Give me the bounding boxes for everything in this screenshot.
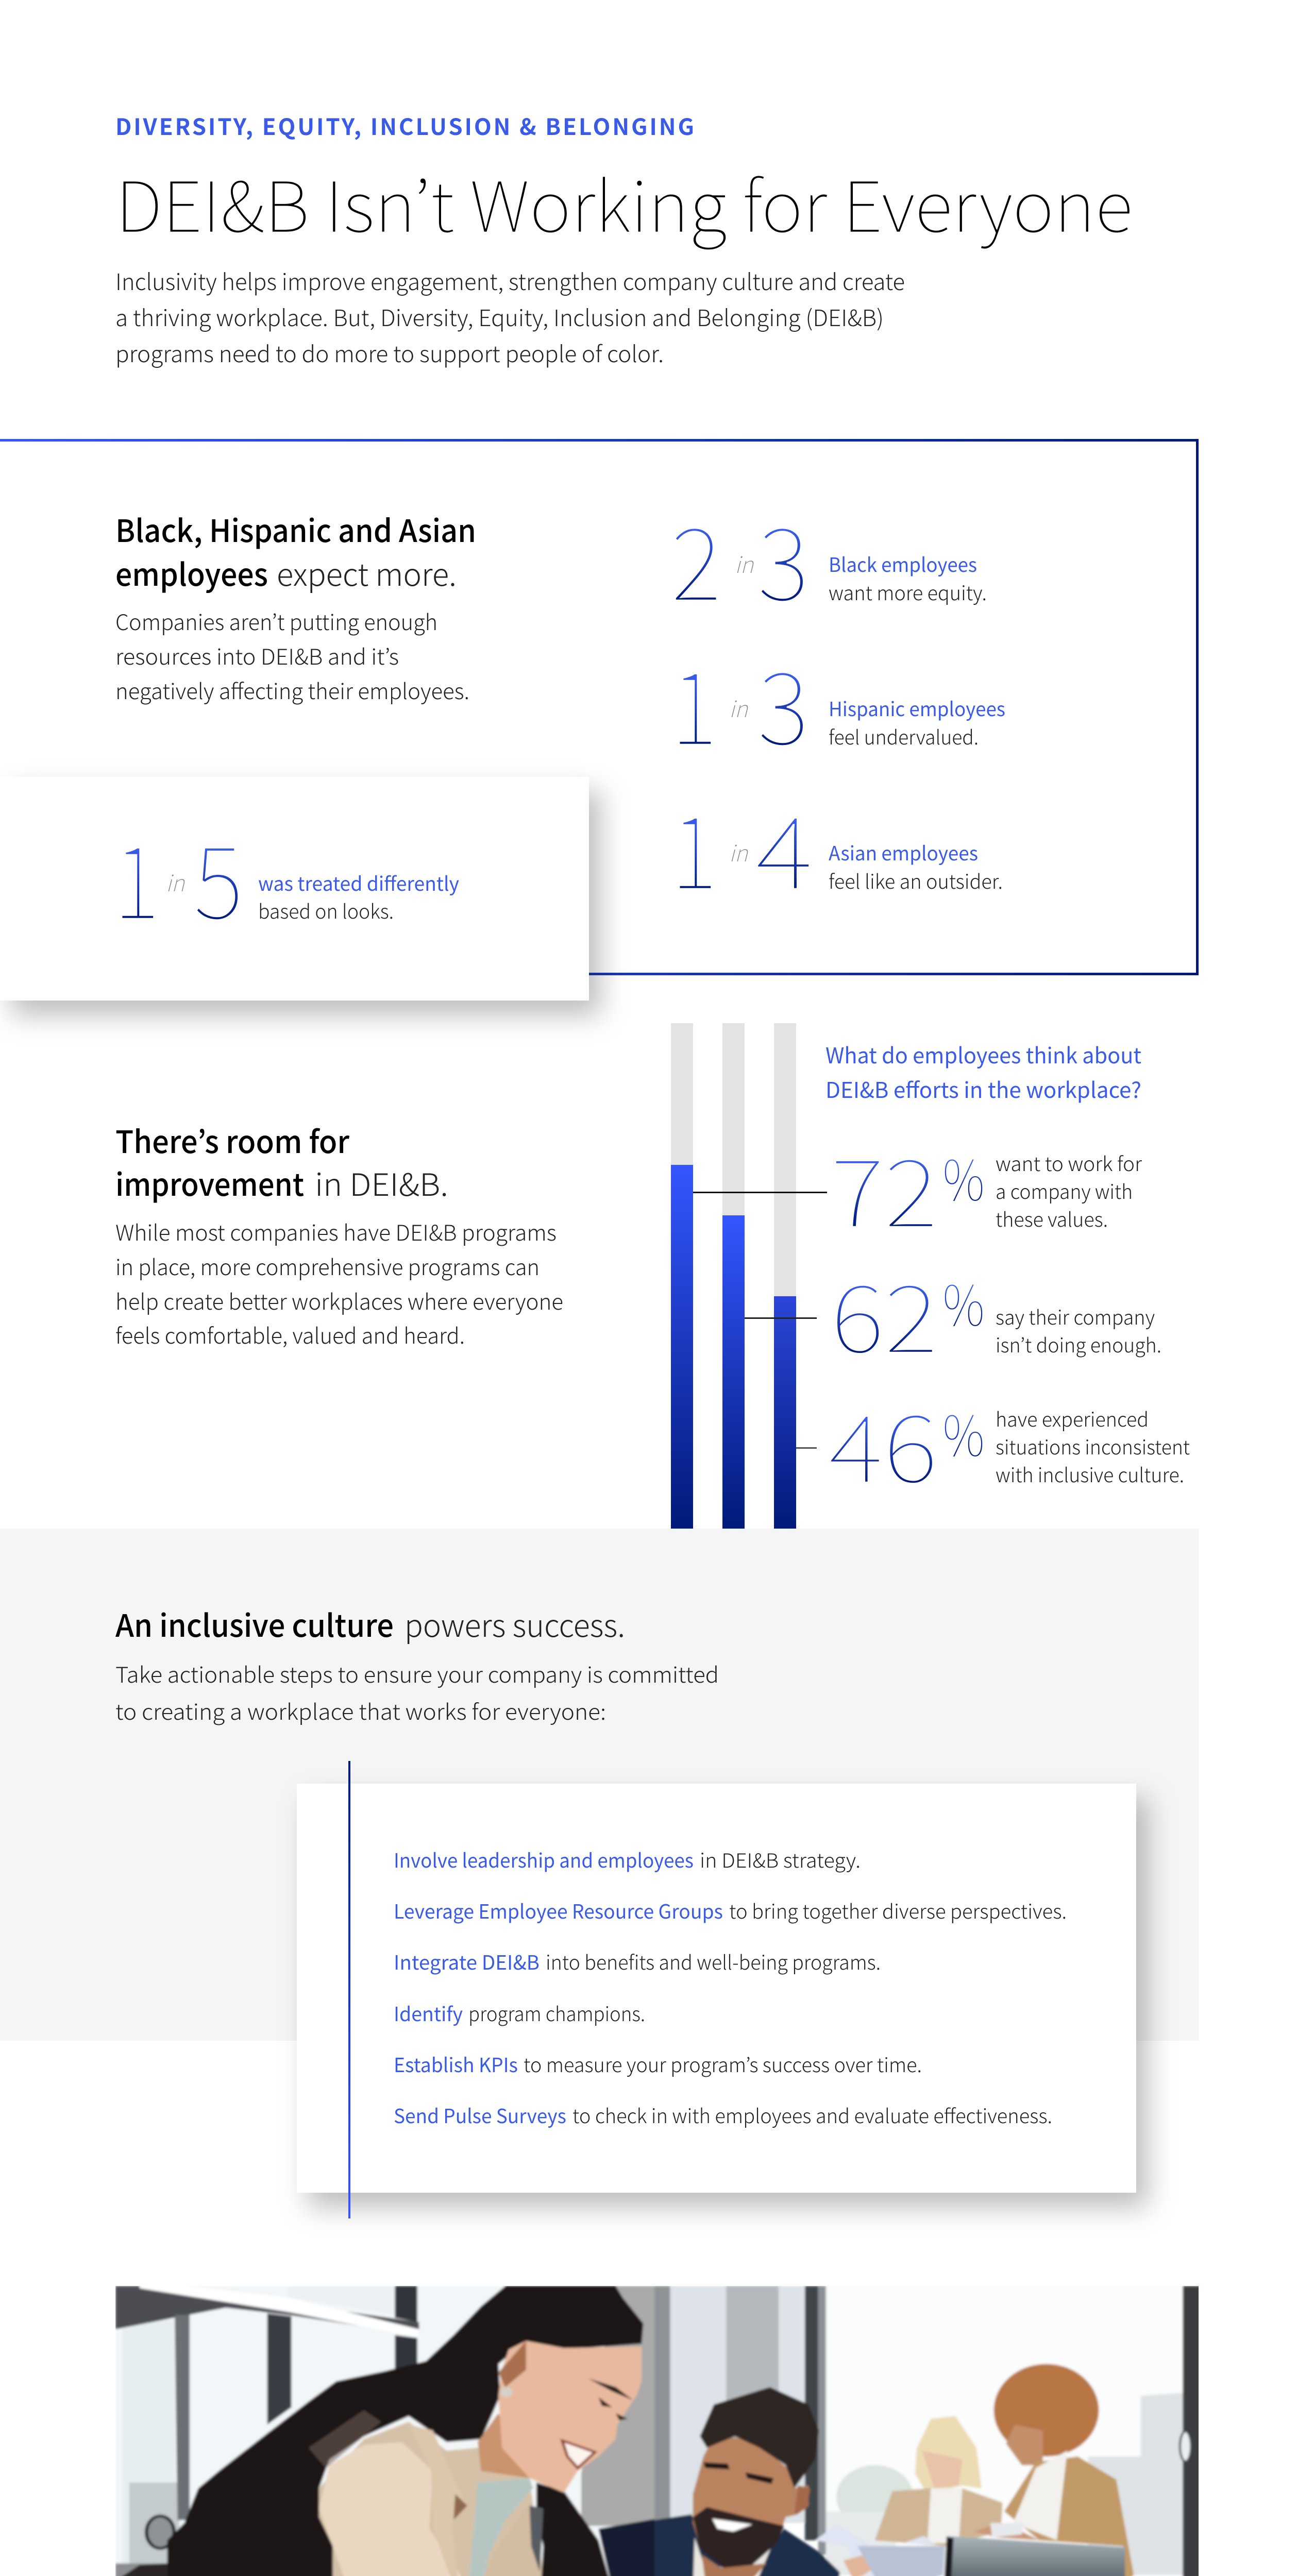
heading: room for improvement [115, 1117, 448, 1205]
list item 2: Leverage Employee Resource Groups [394, 1896, 723, 1924]
stat: 46%: % [942, 1392, 985, 1472]
list item 4: program champions. [468, 1998, 645, 2027]
stat: 1 in 3: 1 [671, 629, 717, 774]
list item 4 [394, 1998, 645, 2027]
title: DEI&B Isn’t Working for Everyone [115, 151, 1133, 252]
list item 6: to check in with employees and evaluate effectiveness. [572, 2100, 1052, 2129]
stat: 1 in 3: in [729, 691, 749, 724]
heading: expect more: employees [115, 550, 268, 595]
card: 1 in 5: based on looks. [258, 896, 394, 924]
heading: expect more: Black, Hispanic and Asian [115, 506, 476, 551]
question heading [826, 1039, 1141, 1105]
panel: expectations frame [0, 439, 1199, 975]
stat: 1 in 4: Asian employees [829, 838, 978, 866]
heading: expect more: expect more. [277, 550, 457, 595]
photo: coworkers in an office [115, 2286, 1202, 2576]
list item 3: Integrate DEI&B [394, 1947, 540, 1975]
intro text: Inclusivity helps improve engagement, strengthen company culture and create [115, 264, 905, 297]
stat: 62%: isn’t doing enough. [996, 1330, 1161, 1358]
list item 5: to measure your program’s success over time. [524, 2049, 922, 2078]
list item 1: Involve leadership and employees [394, 1845, 694, 1873]
stat: 2 in 3: 3 [757, 484, 809, 630]
stat: 1 in 4: feel like an outsider. [829, 866, 1003, 894]
text: programs: help create better workplaces where everyone [115, 1285, 563, 1316]
grey section background [0, 1529, 1199, 2041]
card: 1 in 5: 5 [194, 803, 243, 948]
list item 6: Send Pulse Surveys [394, 2100, 566, 2129]
intro text [115, 264, 905, 369]
text: actionable steps [115, 1658, 719, 1726]
card: 1 in 5 [0, 777, 589, 1001]
stat: 46% [829, 1374, 1190, 1510]
text: companies [115, 605, 469, 706]
question heading: What do employees think about [826, 1039, 1141, 1070]
list item 2: to bring together diverse perspectives. [729, 1896, 1067, 1924]
list item 3 [394, 1947, 881, 1975]
stat: 1 in 3: feel undervalued. [829, 722, 979, 750]
stat: 72%: % [942, 1137, 985, 1217]
text: programs: While most companies have DEI&B programs [115, 1216, 557, 1247]
stat: 1 in 4: 1 [671, 773, 717, 918]
stat: 2 in 3: 2 [671, 484, 721, 630]
list item 5: Establish KPIs [394, 2049, 518, 2078]
heading: inclusive culture [115, 1601, 625, 1646]
stat: 62%: say their company [996, 1302, 1155, 1330]
question heading: DEI&B efforts in the workplace? [826, 1073, 1141, 1105]
stat: 72%: a company with [996, 1176, 1133, 1205]
stat: 46%: have experienced [996, 1404, 1149, 1432]
card: 1 in 5: was treated differently [258, 868, 459, 896]
intro text: a thriving workplace. But, Diversity, Equity, Inclusion and Belonging (DEI&B) [115, 300, 884, 333]
card: 1 in 5: in [166, 865, 186, 898]
stat: 1 in 3 [671, 629, 1005, 774]
card: 1 in 5: 1 [113, 803, 160, 948]
list item 1: in DEI&B strategy. [700, 1845, 861, 1873]
intro text: programs need to do more to support people of color. [115, 336, 664, 369]
list item 3: into benefits and well-being programs. [546, 1947, 881, 1975]
stat: 46%: situations inconsistent [996, 1432, 1190, 1460]
stat: 62%: % [942, 1262, 985, 1342]
stat: 72%: 72 [831, 1118, 938, 1254]
text: companies: resources into DEI&B and it’s [115, 640, 399, 671]
text: programs: feels comfortable, valued and heard. [115, 1319, 465, 1350]
stat: 62% [831, 1244, 1161, 1380]
stat: 72%: these values. [996, 1204, 1108, 1232]
list item 2 [394, 1896, 1067, 1924]
heading: room for improvement: improvement [115, 1160, 304, 1205]
text: actionable steps: to creating a workplace that works for everyone: [115, 1695, 606, 1726]
text: companies: Companies aren’t putting enough [115, 605, 437, 637]
stat: 72%: want to work for [996, 1148, 1142, 1177]
heading: expect more [115, 506, 476, 595]
text: actionable steps: Take actionable steps to ensure your company is committed [115, 1658, 719, 1689]
bar chart [671, 1023, 827, 1529]
list item 1 [394, 1845, 861, 1873]
stat: 1 in 4 [671, 773, 1003, 918]
stat: 2 in 3: want more equity. [829, 578, 987, 606]
text: programs: in place, more comprehensive programs can [115, 1250, 540, 1282]
text: companies: negatively affecting their employees. [115, 674, 469, 706]
heading: inclusive culture: An inclusive culture [115, 1601, 394, 1646]
stat: 46%: 46 [829, 1374, 938, 1510]
stat: 72% [831, 1118, 1142, 1254]
stat: 2 in 3: Black employees [829, 549, 977, 578]
stat: 2 in 3: in [735, 547, 754, 580]
list item 4: Identify [394, 1998, 463, 2027]
heading: room for improvement: in DEI&B. [315, 1160, 448, 1205]
stat: 2 in 3 [671, 484, 987, 630]
stat: 1 in 3: 3 [757, 629, 809, 774]
stat: 1 in 4: in [729, 835, 749, 868]
text: programs [115, 1216, 563, 1350]
stat: 62%: 62 [831, 1244, 938, 1380]
heading: room for improvement: There’s room for [115, 1117, 349, 1162]
panel: action list [297, 1761, 1136, 2218]
stat: 1 in 3: Hispanic employees [829, 693, 1005, 722]
stat: 46%: with inclusive culture. [996, 1460, 1184, 1488]
heading: inclusive culture: powers success. [405, 1601, 625, 1646]
stat: 1 in 4: 4 [755, 773, 813, 918]
eyebrow: DIVERSITY, EQUITY, INCLUSION & BELONGING [115, 109, 696, 142]
